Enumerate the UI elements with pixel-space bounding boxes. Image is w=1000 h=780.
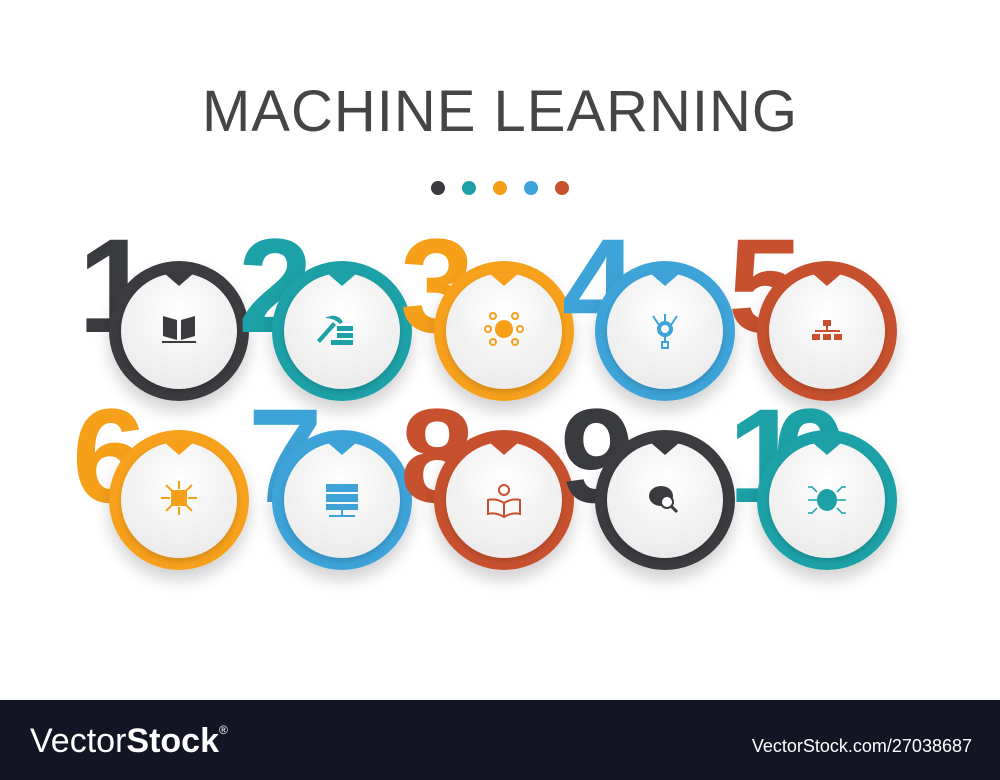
icon: book lightbulb (488, 485, 520, 517)
footer id: VectorStock.com/27038687 (752, 736, 972, 756)
item 3 (400, 212, 574, 401)
icon: brain network (485, 313, 523, 345)
item 10 (728, 382, 897, 570)
item 5: 5 (728, 212, 803, 361)
item 2 (238, 212, 412, 401)
item 9: 9 (560, 382, 635, 531)
item 8: 8 (400, 382, 475, 531)
item 8 (400, 382, 574, 570)
item 10: 10 (728, 382, 843, 531)
title: MACHINE LEARNING (202, 79, 798, 144)
icon: gear funnel (653, 314, 677, 348)
item 6 (72, 382, 249, 570)
item 4 (562, 212, 735, 401)
icon: brain circuit (808, 487, 846, 513)
item 7: 7 (248, 382, 323, 531)
item 1 (78, 212, 249, 401)
dots row (431, 181, 569, 195)
item 2: 2 (238, 212, 313, 361)
icon: hierarchy (812, 320, 842, 340)
footer logo: VectorStock (30, 722, 219, 760)
icon: brain search (649, 486, 677, 512)
item 9 (560, 382, 735, 570)
icon: book brain (162, 316, 196, 343)
icon: server (326, 484, 358, 517)
item 5 (728, 212, 897, 401)
item 4: 4 (562, 212, 637, 361)
item 7 (248, 382, 412, 570)
item 6: 6 (72, 382, 147, 531)
icon: mining (317, 316, 353, 345)
footer bar (0, 700, 1000, 780)
icon: AI chip arrows (161, 481, 197, 515)
footer logo: ® (219, 723, 228, 737)
item 1: 1 (78, 212, 153, 361)
item 3: 3 (400, 212, 475, 361)
